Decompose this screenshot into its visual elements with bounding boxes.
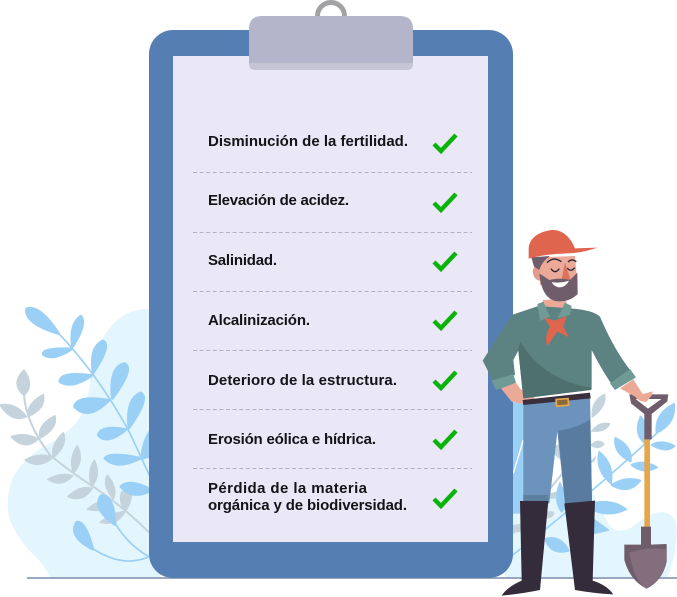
list item 6 — [208, 431, 456, 448]
white stem — [513, 440, 523, 473]
list item 1: Disminución de la fertilidad. — [208, 133, 408, 150]
divider lines — [193, 172, 472, 468]
list item 2: Elevación de acidez. — [208, 192, 349, 209]
list item 7: orgánica y de biodiversidad. — [208, 497, 407, 514]
paper — [173, 56, 488, 542]
man upper body — [483, 230, 653, 406]
list item 2 — [208, 192, 456, 210]
list item 4: Alcalinización. — [208, 312, 310, 329]
collar — [537, 302, 572, 321]
boots — [502, 501, 613, 596]
list item 6: Erosión eólica e hídrica. — [208, 431, 376, 448]
blue branch — [27, 308, 153, 561]
check 2 — [434, 194, 456, 210]
list item 4 — [208, 312, 456, 329]
check 6 — [434, 431, 456, 447]
shovel — [624, 394, 668, 589]
belt — [523, 393, 591, 406]
clip — [249, 16, 413, 70]
clip ring — [318, 2, 344, 30]
background blob: right — [505, 490, 677, 578]
shirt — [483, 306, 630, 398]
list item 5: Deterioro de la estructura. — [208, 372, 397, 389]
check 3 — [434, 253, 456, 269]
list item 3 — [208, 252, 456, 269]
check 1 — [434, 135, 456, 151]
check 7 — [434, 490, 456, 506]
right forearm and hand — [620, 379, 653, 402]
cuffs — [492, 369, 636, 390]
man lower body and shovel — [502, 394, 668, 596]
board — [149, 30, 513, 578]
check 4 — [434, 312, 456, 328]
clipboard — [149, 2, 513, 578]
left hand — [501, 383, 535, 404]
check 5 — [434, 372, 456, 388]
bandana — [544, 316, 569, 346]
right plants — [513, 393, 674, 555]
jeans — [523, 394, 592, 503]
list item 7 — [208, 480, 456, 514]
grey branch — [0, 370, 150, 533]
ground line — [27, 577, 677, 579]
neck — [543, 298, 567, 324]
shirt shadow — [518, 342, 591, 398]
list item 3: Salinidad. — [208, 252, 277, 269]
grey leaves — [513, 393, 611, 533]
background blob: left — [8, 309, 160, 578]
list item 7: Pérdida de la materia — [208, 480, 368, 497]
blue leaves — [513, 403, 674, 555]
left plants — [0, 308, 153, 561]
head — [529, 230, 597, 301]
